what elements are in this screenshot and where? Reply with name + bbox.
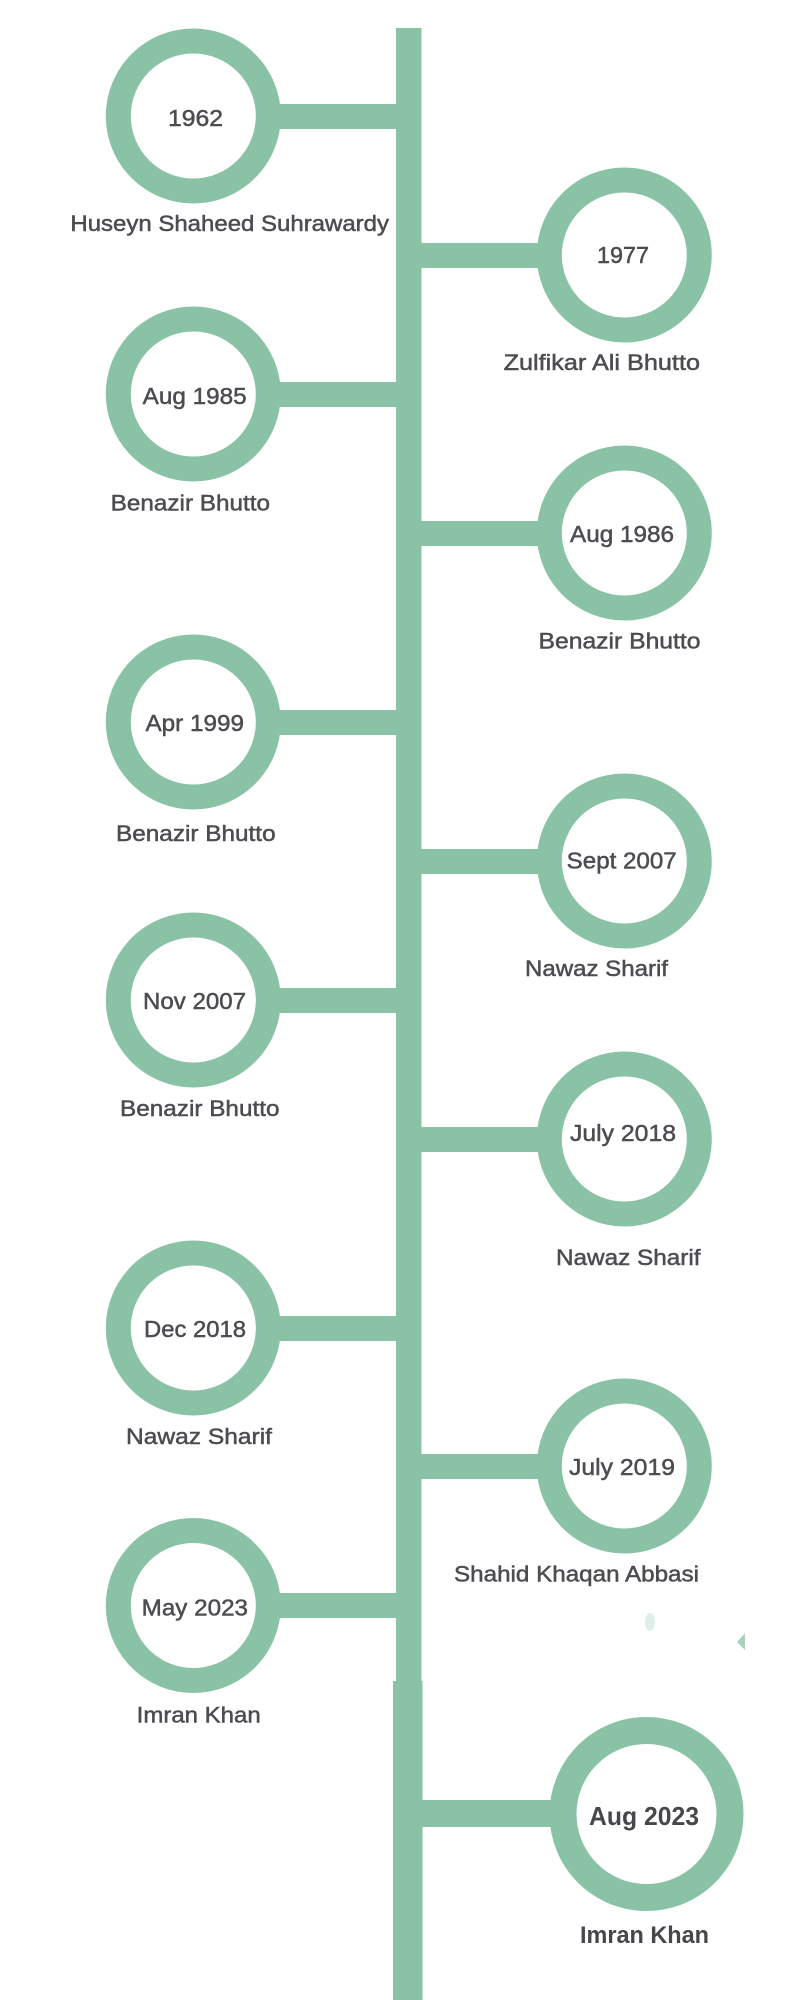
entry: Aug 1985: Aug 1985	[143, 383, 247, 409]
entry: July 2019	[418, 1391, 699, 1587]
entry: Aug 1985: Benazir Bhutto	[111, 490, 270, 516]
entry: Sept 2007: Nawaz Sharif	[525, 956, 669, 981]
entry: 1962: Huseyn Shaheed Suhrawardy	[70, 211, 390, 236]
entry: July 2019: Shahid Khaqan Abbasi	[454, 1562, 699, 1587]
entry: July 2019: July 2019	[569, 1454, 675, 1480]
entry: 1962	[70, 41, 400, 236]
entry: July 2018: July 2018	[570, 1120, 676, 1146]
entry: 1977	[418, 180, 700, 375]
entry: 1977: 1977	[597, 242, 649, 268]
entry: Dec 2018: Dec 2018	[144, 1316, 246, 1342]
entry: Nov 2007	[118, 925, 400, 1121]
entry: Sept 2007: Sept 2007	[567, 848, 677, 874]
entry: Dec 2018	[118, 1253, 400, 1449]
entry: July 2018: Nawaz Sharif	[556, 1245, 701, 1270]
entry: May 2023: Imran Khan	[137, 1703, 261, 1728]
entry: Aug 2023	[418, 1730, 730, 1949]
entry: Apr 1999: Benazir Bhutto	[116, 821, 276, 846]
entry: Apr 1999	[116, 647, 400, 846]
entry: Aug 2023: Imran Khan	[580, 1922, 709, 1949]
entry: Aug 1986: Benazir Bhutto	[538, 628, 700, 654]
entry: May 2023: May 2023	[142, 1595, 248, 1621]
entry: May 2023	[118, 1530, 400, 1728]
entry: Sept 2007	[418, 786, 699, 981]
entry: Dec 2018: Nawaz Sharif	[126, 1424, 273, 1449]
entry: Nov 2007: Nov 2007	[143, 988, 246, 1014]
entry: 1977: Zulfikar Ali Bhutto	[504, 350, 700, 375]
entry: July 2018	[418, 1064, 701, 1270]
entry: Nov 2007: Benazir Bhutto	[120, 1096, 280, 1121]
smudge artifacts	[645, 1613, 745, 1650]
timeline stem	[393, 28, 422, 2000]
entry: Aug 2023: Aug 2023	[589, 1801, 699, 1831]
entry: Aug 1986	[418, 458, 700, 654]
entry: Apr 1999: Apr 1999	[146, 710, 244, 736]
entry: 1962: 1962	[168, 105, 223, 131]
entry: Aug 1986: Aug 1986	[570, 521, 674, 547]
entry: Aug 1985	[111, 319, 400, 516]
